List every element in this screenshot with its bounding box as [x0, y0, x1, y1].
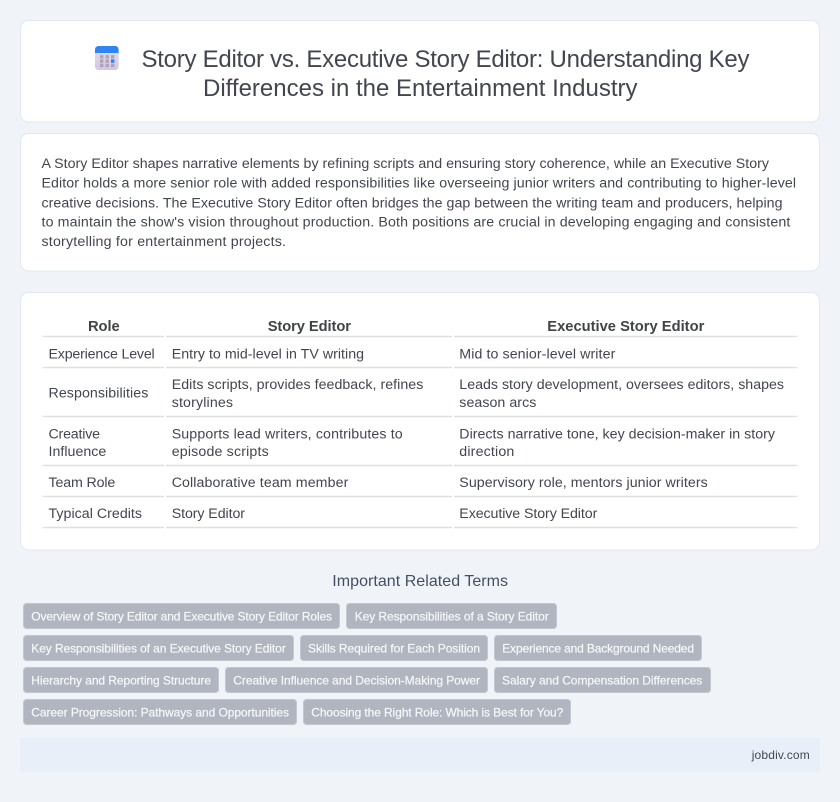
row: creative influence: Influence	[48, 444, 106, 460]
table header: Story Editor	[268, 319, 351, 335]
panel: intro paragraph	[20, 134, 820, 271]
row: creative influence: Supports lead writers, contributes to	[172, 426, 403, 442]
row: experience level: Experience Level	[48, 346, 155, 362]
row: creative influence: Creative	[48, 426, 100, 442]
footer bar	[20, 738, 820, 772]
row: responsibilities	[48, 377, 784, 411]
row: typical credits: Executive Story Editor	[459, 506, 598, 522]
row: typical credits: Story Editor	[172, 506, 245, 522]
title: Story Editor vs. Executive Story Editor: Understanding Key	[142, 46, 750, 73]
row: typical credits: Typical Credits	[48, 506, 142, 522]
heading: important related terms: Important Related Terms	[332, 573, 508, 590]
row: experience level	[48, 346, 616, 362]
intro text	[42, 156, 796, 250]
intro text: creative decisions. The Executive Story Editor often bridges the gap between the writing team and producers, helping	[42, 196, 782, 212]
row: typical credits	[48, 506, 598, 522]
chip: Career Progression: Pathways and Opportunities	[31, 705, 289, 719]
chip	[300, 636, 488, 660]
title	[142, 46, 750, 102]
chip	[24, 604, 340, 628]
related term chips	[24, 604, 710, 724]
intro text: to maintain the show's vision throughout production. Both positions are crucial in developing engaging and consistent	[42, 214, 790, 230]
row: team role: Team Role	[48, 475, 115, 491]
chip	[304, 700, 570, 724]
row: team role	[48, 475, 708, 491]
chip: Hierarchy and Reporting Structure	[31, 673, 211, 687]
row: creative influence: Directs narrative tone, key decision-maker in story	[459, 426, 776, 442]
intro text: A Story Editor shapes narrative elements by refining scripts and ensuring story coherence, while an Executive Story	[42, 156, 770, 172]
chip: Salary and Compensation Differences	[502, 673, 702, 687]
chip	[494, 668, 710, 692]
chip	[494, 636, 702, 660]
row: team role: Supervisory role, mentors junior writers	[459, 475, 708, 491]
row: responsibilities: Leads story development, oversees editors, shapes	[459, 377, 784, 393]
chip: Creative Influence and Decision-Making Power	[233, 673, 480, 687]
table header: Role	[88, 319, 120, 335]
title: Differences in the Entertainment Industry	[203, 75, 638, 102]
chip: Experience and Background Needed	[502, 641, 694, 655]
chip	[226, 668, 488, 692]
chip	[24, 700, 296, 724]
chip: Choosing the Right Role: Which is Best for You?	[311, 705, 564, 719]
icon: calendar	[95, 46, 119, 70]
panel: comparison table	[20, 292, 820, 550]
chip	[24, 636, 294, 660]
table header	[88, 319, 705, 335]
header panel	[20, 20, 820, 122]
row: responsibilities: storylines	[172, 395, 233, 411]
row: responsibilities: Edits scripts, provides feedback, refines	[172, 377, 423, 393]
intro text: Editor holds a more senior role with added responsibilities like overseeing junior writers and contributing to higher-level	[42, 176, 796, 192]
row: team role: Collaborative team member	[172, 475, 349, 491]
row: creative influence	[48, 426, 776, 460]
row: experience level: Entry to mid-level in TV writing	[172, 346, 364, 362]
row: creative influence: episode scripts	[172, 444, 269, 460]
chip: Overview of Story Editor and Executive Story Editor Roles	[31, 609, 332, 623]
row: creative influence: direction	[459, 444, 514, 460]
chip: Skills Required for Each Position	[308, 641, 480, 655]
intro text: storytelling for entertainment projects.	[42, 234, 286, 250]
footer source: jobdiv.com	[751, 748, 810, 762]
table header: Executive Story Editor	[547, 319, 705, 335]
row: experience level: Mid to senior-level writer	[459, 346, 616, 362]
chip: Key Responsibilities of a Story Editor	[355, 609, 549, 623]
chip	[346, 604, 556, 628]
chip: Key Responsibilities of an Executive Story Editor	[31, 641, 286, 655]
row: responsibilities: Responsibilities	[48, 386, 148, 402]
chip	[24, 668, 218, 692]
row: responsibilities: season arcs	[459, 395, 536, 411]
